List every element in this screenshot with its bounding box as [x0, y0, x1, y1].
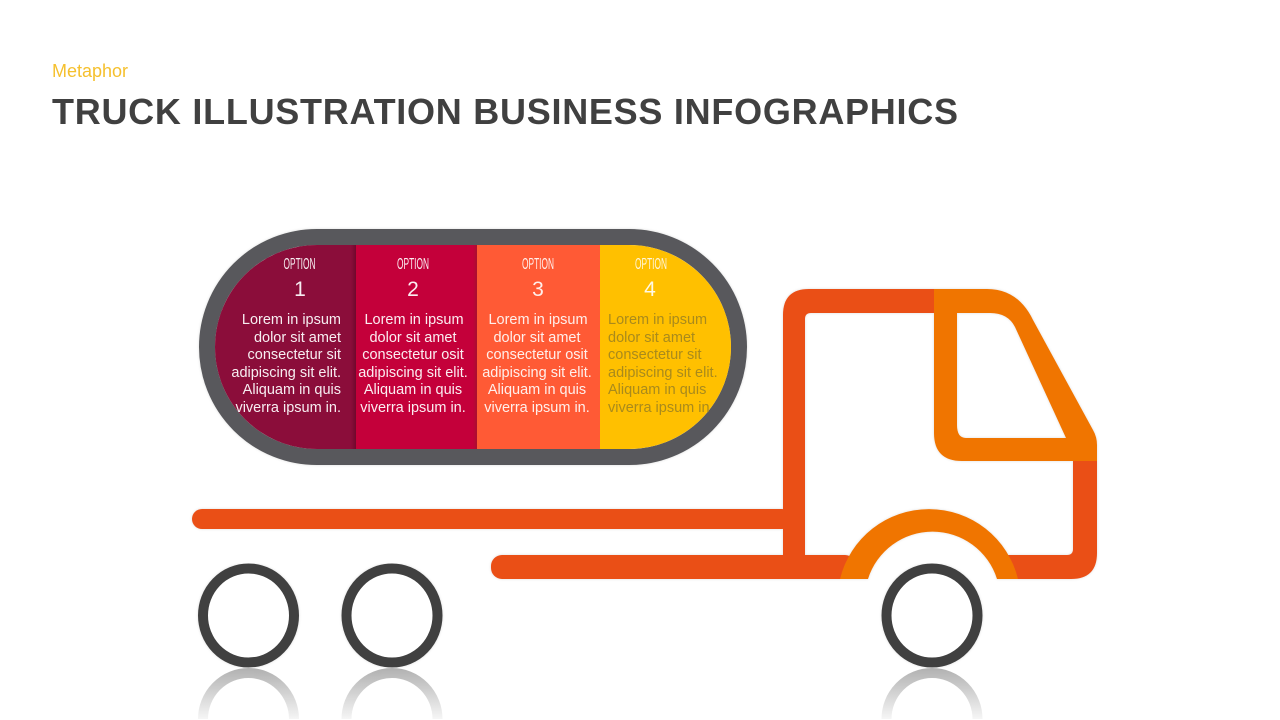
option 1: 1 — [294, 278, 306, 301]
wheels — [203, 568, 978, 662]
option 2: consectetur osit — [362, 347, 464, 363]
eyebrow: Metaphor: Metaphor — [52, 61, 128, 81]
option 3: Aliquam in quis — [488, 382, 586, 398]
cab window frame — [934, 289, 1097, 461]
option 3: OPTION — [522, 254, 554, 273]
title: TRUCK ILLUSTRATION BUSINESS INFOGRAPHICS — [52, 91, 958, 132]
option 2: Lorem in ipsum — [364, 312, 464, 328]
option 3: adipiscing sit elit. — [482, 365, 592, 381]
option 3: 3 — [532, 278, 544, 301]
option 1: consectetur sit — [248, 347, 341, 363]
option 3: dolor sit amet — [493, 330, 581, 346]
rear wheel 1 — [203, 568, 294, 662]
rear wheel 2 — [346, 568, 438, 662]
option 4 — [608, 254, 718, 416]
truck chassis and cab — [192, 289, 1097, 579]
option 4: dolor sit amet — [608, 330, 695, 346]
option 2: dolor sit amet — [369, 330, 457, 346]
option 4: consectetur sit — [608, 347, 702, 363]
front wheel — [886, 568, 978, 662]
option 2: OPTION — [397, 254, 429, 273]
option 1: OPTION — [284, 254, 315, 273]
wheel reflections — [203, 673, 978, 719]
option 2: viverra ipsum in. — [360, 400, 466, 416]
option 1: Aliquam in quis — [243, 382, 341, 398]
option 1: viverra ipsum in. — [235, 400, 341, 416]
option 3: consectetur osit — [486, 347, 588, 363]
option 2: Aliquam in quis — [364, 382, 462, 398]
option 2: 2 — [407, 278, 419, 301]
option 4: adipiscing sit elit. — [608, 365, 718, 381]
option 4: 4 — [644, 278, 656, 301]
option 4: OPTION — [635, 254, 667, 273]
option 4: Aliquam in quis — [608, 382, 706, 398]
option 3: Lorem in ipsum — [488, 312, 588, 328]
cab front lower — [1005, 459, 1097, 579]
option 2: adipiscing sit elit. — [358, 365, 468, 381]
option 1: adipiscing sit elit. — [231, 365, 341, 381]
option 3: viverra ipsum in. — [484, 400, 590, 416]
option 4: Lorem in ipsum — [608, 312, 707, 328]
cab body rear and roof — [783, 289, 936, 565]
panel: options tank — [207, 237, 739, 457]
wheel arch — [840, 509, 1018, 579]
option 1 — [231, 254, 341, 416]
option 1: Lorem in ipsum — [242, 312, 341, 328]
tank outline — [207, 237, 739, 457]
option 1: dolor sit amet — [254, 330, 341, 346]
flatbed bar — [192, 509, 792, 529]
option 3 — [482, 254, 592, 416]
tank segments — [215, 245, 731, 449]
lower chassis bar — [491, 555, 856, 579]
option 2 — [358, 254, 468, 416]
option 4: viverra ipsum in — [608, 400, 710, 416]
